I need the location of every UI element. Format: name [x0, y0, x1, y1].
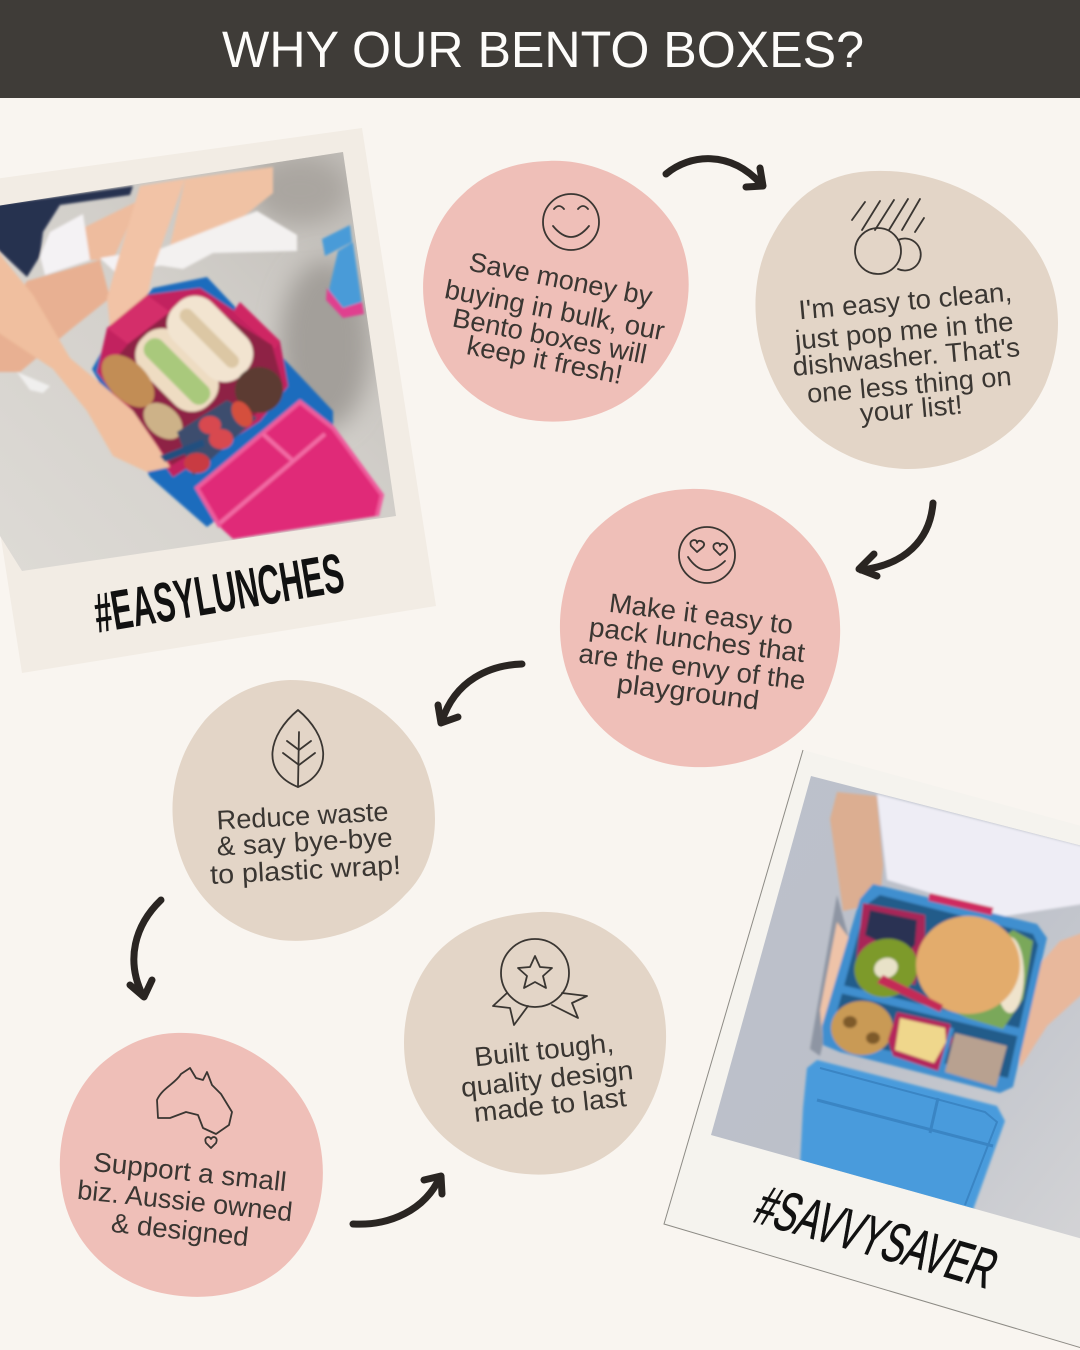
text: envy of the playground	[577, 588, 807, 716]
icon: heart eyes face	[679, 527, 735, 583]
pink blob	[560, 489, 840, 767]
panel: envy of the playground	[560, 489, 840, 767]
panel: polaroid photo easy lunches	[0, 128, 436, 673]
hashtag: easy lunches: #EASYLUNCHES	[89, 541, 348, 645]
icon: leaf	[272, 710, 323, 787]
arrow: small biz to built tough	[353, 1176, 442, 1224]
panel: easy to clean	[755, 171, 1058, 469]
icon: smile face	[543, 194, 599, 250]
panel: save money	[423, 161, 689, 422]
text: envy of the playground: playground	[615, 668, 761, 716]
text: envy of the playground: Make it easy to	[607, 588, 795, 640]
arrow: clean to lunches	[859, 503, 933, 576]
text: easy to clean: dishwasher. That's	[791, 332, 1021, 382]
text: small Aussie business: & designed	[110, 1208, 250, 1252]
text: easy to clean: one less thing on	[806, 361, 1013, 409]
title banner	[0, 0, 1080, 98]
arrow: save money to clean	[666, 159, 763, 187]
polaroid frame	[664, 750, 1080, 1349]
beige blob	[172, 680, 435, 941]
frame outline	[664, 750, 1080, 1349]
panel: reduce waste	[172, 680, 435, 941]
pink blob	[60, 1033, 323, 1297]
text: easy to clean: your list!	[859, 390, 964, 428]
text: built tough: made to last	[472, 1082, 628, 1128]
title: WHY OUR BENTO BOXES?	[222, 21, 864, 78]
pink blob	[423, 161, 689, 422]
text: save money	[442, 247, 667, 390]
text: reduce waste: to plastic wrap!	[209, 850, 402, 890]
text: save money: buying in bulk, our	[442, 274, 667, 346]
arrow: waste to small biz	[130, 900, 161, 997]
panel: built tough	[404, 912, 666, 1175]
text: small Aussie business: biz. Aussie owned	[76, 1175, 294, 1227]
photo: hands holding blue bento box	[700, 770, 1080, 1250]
icon: award medal	[493, 939, 587, 1025]
text: built tough: quality design	[459, 1055, 635, 1103]
text: built tough	[459, 1028, 635, 1128]
text: reduce waste: & say bye-bye	[216, 822, 393, 862]
text: save money: Save money by	[467, 247, 655, 312]
text: save money: keep it fresh!	[464, 330, 625, 390]
beige blob	[755, 171, 1058, 469]
text: easy to clean: just pop me in the	[793, 307, 1015, 356]
text: easy to clean: I'm easy to clean,	[797, 277, 1013, 325]
icon: dishes under water	[852, 199, 924, 274]
text: built tough: Built tough,	[473, 1028, 615, 1072]
arrow: lunches to waste	[438, 664, 522, 723]
blue lid	[800, 1060, 1005, 1210]
text: easy to clean	[791, 277, 1021, 428]
panel: small Aussie business	[60, 1033, 323, 1297]
photo: child with pink bento box	[0, 150, 410, 580]
text: save money: Bento boxes will	[450, 303, 649, 370]
text: envy of the playground: are the envy of the	[577, 638, 807, 696]
text: small Aussie business: Support a small	[92, 1147, 288, 1197]
text: reduce waste	[209, 797, 402, 890]
text: reduce waste: Reduce waste	[216, 797, 389, 835]
icon: Australia map	[157, 1068, 232, 1148]
panel: polaroid photo savvy saver	[664, 750, 1080, 1349]
polaroid frame	[0, 128, 436, 673]
text: small Aussie business	[76, 1147, 294, 1252]
beige blob	[404, 912, 666, 1175]
text: envy of the playground: pack lunches that	[588, 612, 807, 668]
